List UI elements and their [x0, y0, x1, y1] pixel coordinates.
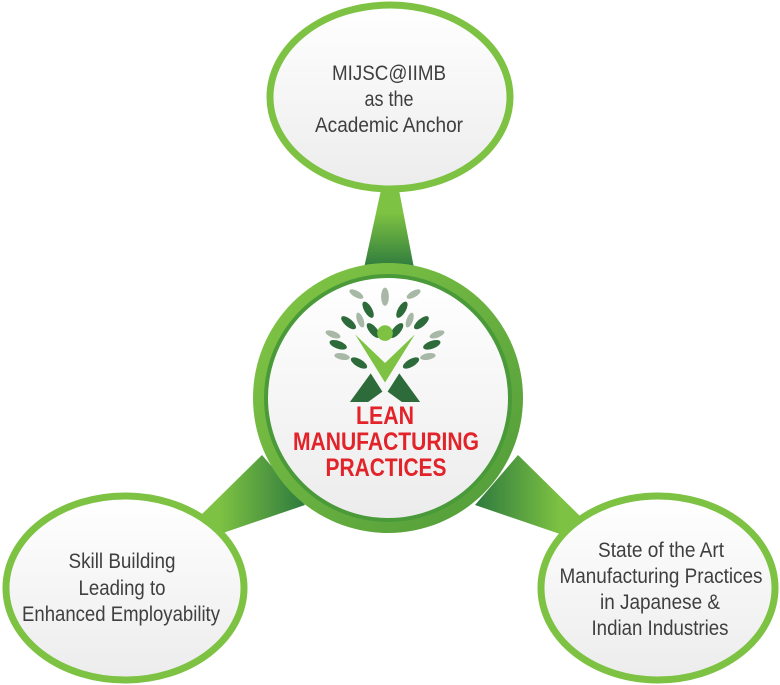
bubble: top	[270, 5, 510, 189]
connector: left	[198, 455, 305, 534]
bubble: right: Indian Industries	[592, 617, 728, 640]
bubble: right	[541, 496, 775, 680]
bubble: left	[6, 496, 244, 680]
bubble: right: State of the Art	[598, 539, 724, 562]
title: lean manufacturing practices: PRACTICES	[326, 454, 446, 482]
bubble: top: as the	[364, 88, 414, 111]
connector: right	[475, 455, 582, 534]
title: lean manufacturing practices: LEAN	[356, 402, 414, 430]
bubble: left: Skill Building	[68, 550, 176, 573]
title: lean manufacturing practices: MANUFACTURING	[293, 428, 479, 456]
bubble: top: Academic Anchor	[315, 114, 463, 137]
bubble: left: Enhanced Employability	[22, 603, 220, 626]
title: lean manufacturing practices	[293, 402, 479, 482]
bubble: top: MIJSC@IIMB	[332, 62, 446, 85]
icon: tree logo	[325, 287, 445, 402]
bubble: right: Manufacturing Practices	[560, 565, 762, 588]
bubble: right: in Japanese &	[600, 591, 720, 614]
center circle	[253, 263, 523, 533]
bubble: left: Leading to	[78, 577, 166, 600]
connector: top	[364, 190, 414, 268]
